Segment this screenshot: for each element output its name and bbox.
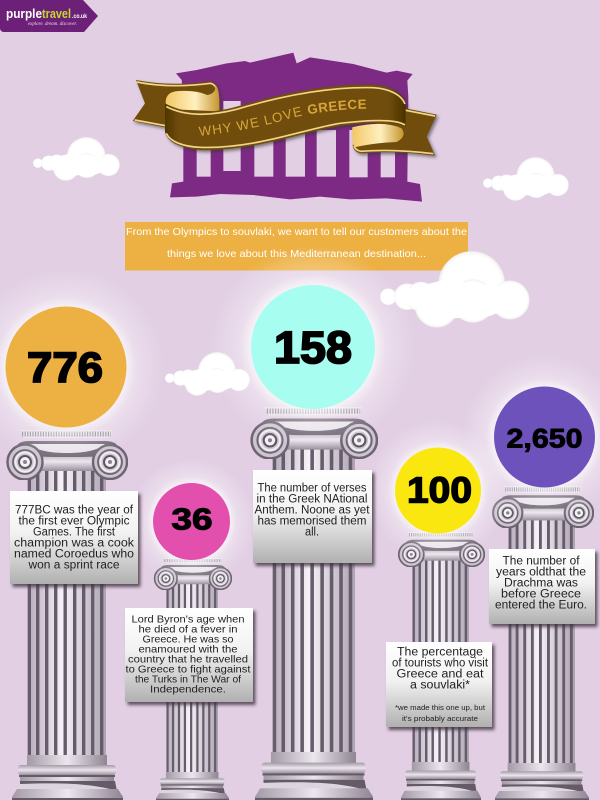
number circle 100 xyxy=(368,420,508,560)
card: 776 fact xyxy=(10,491,138,584)
cloud: top left xyxy=(33,137,120,181)
number circle 100: 100 xyxy=(407,470,472,510)
cloud: top right xyxy=(483,157,569,201)
card: 158 fact: The number of verses xyxy=(258,482,367,494)
ribbon banner xyxy=(132,80,440,160)
intro banner xyxy=(125,222,468,270)
card: 36 fact: he died of a fever in xyxy=(138,625,238,636)
column 776 xyxy=(8,430,127,800)
ribbon: right tail xyxy=(353,108,437,156)
card: 36 fact: Greece. He was so xyxy=(142,635,234,646)
intro banner: things we love about this Mediterranean destination... xyxy=(167,248,426,260)
card: 776 fact: 777BC was the year of xyxy=(15,504,134,516)
ribbon: left fold xyxy=(166,85,219,111)
card: 158 fact: in the Greek NAtional xyxy=(256,494,368,506)
number circle 2,650: 2,650 xyxy=(506,424,582,454)
card: 36 fact: the Turks in The War of xyxy=(135,675,241,686)
card: 776 fact: won a sprint race xyxy=(27,560,119,572)
cloud: large centre right xyxy=(380,251,530,328)
number circle 36: 36 xyxy=(172,502,212,536)
card: 2,650 fact: entered the Euro. xyxy=(495,600,587,612)
card: 776 fact: champion was a cook xyxy=(14,538,134,550)
logo: purple travel: purple xyxy=(6,7,42,21)
card: 36 fact: enamoured with the xyxy=(138,645,238,656)
card: 36 fact: country that he travelled xyxy=(128,655,248,666)
ribbon title: WHY WE LOVE GREECE xyxy=(198,100,366,136)
card: 100 fact: The percentage xyxy=(397,646,483,658)
column 100 xyxy=(399,532,484,800)
card: 2,650 fact: years oldthat the xyxy=(496,566,586,578)
card: 776 fact: Games. The first xyxy=(33,526,116,538)
intro banner: From the Olympics to souvlaki, we want to tell our customers about the xyxy=(126,226,467,238)
ribbon: left tail xyxy=(133,80,219,127)
logo: purple travel: travel xyxy=(42,7,71,21)
cloud: middle xyxy=(165,352,250,396)
card: 36 fact: Lord Byron's age when xyxy=(132,615,244,626)
card: 36 fact: Independence. xyxy=(150,685,226,696)
card: 776 fact: the first ever Olympic xyxy=(18,516,130,528)
card: 100 fact: of tourists who visit xyxy=(392,658,489,670)
card: 100 fact: a souvlaki* xyxy=(410,680,471,692)
column 36 xyxy=(155,558,231,800)
number circle 2,650 xyxy=(462,355,600,519)
card: 2,650 fact: before Greece xyxy=(501,588,581,600)
temple silhouette xyxy=(170,53,422,202)
card: 2,650 fact: Drachma was xyxy=(504,578,578,590)
card: 2,650 fact xyxy=(489,549,595,624)
logo: purple travel xyxy=(0,0,98,32)
card: 100 fact xyxy=(386,642,492,727)
ribbon: gold stripes xyxy=(166,88,405,147)
card: 36 fact xyxy=(125,608,253,702)
number circle 36 xyxy=(128,458,254,584)
number circle 776: 776 xyxy=(27,344,103,392)
card: 158 fact: all. xyxy=(305,526,319,538)
card: 776 fact: named Coroedus who xyxy=(14,548,134,560)
column 2,650 xyxy=(493,486,593,800)
number circle 158 xyxy=(211,245,415,449)
number circle 776 xyxy=(0,269,164,465)
number circle 158: 158 xyxy=(274,322,352,373)
ribbon: main band xyxy=(165,85,406,150)
card: 100 fact: *we made this one up, but xyxy=(395,703,485,712)
card: 158 fact: Anthem. Noone as yet xyxy=(254,504,370,516)
card: 158 fact xyxy=(253,470,372,563)
card: 100 fact: it's probably accurate xyxy=(402,714,478,723)
ribbon: right fold xyxy=(352,124,404,147)
card: 2,650 fact: The number of xyxy=(502,556,580,568)
logo: purple travel: explore. dream. discover. xyxy=(28,22,77,27)
card: 100 fact: Greece and eat xyxy=(396,668,484,680)
column 158 xyxy=(252,407,377,800)
card: 158 fact: has memorised them xyxy=(258,516,366,528)
logo: purple travel: .co.uk xyxy=(72,13,87,20)
card: 36 fact: to Greece to fight against xyxy=(126,665,251,676)
